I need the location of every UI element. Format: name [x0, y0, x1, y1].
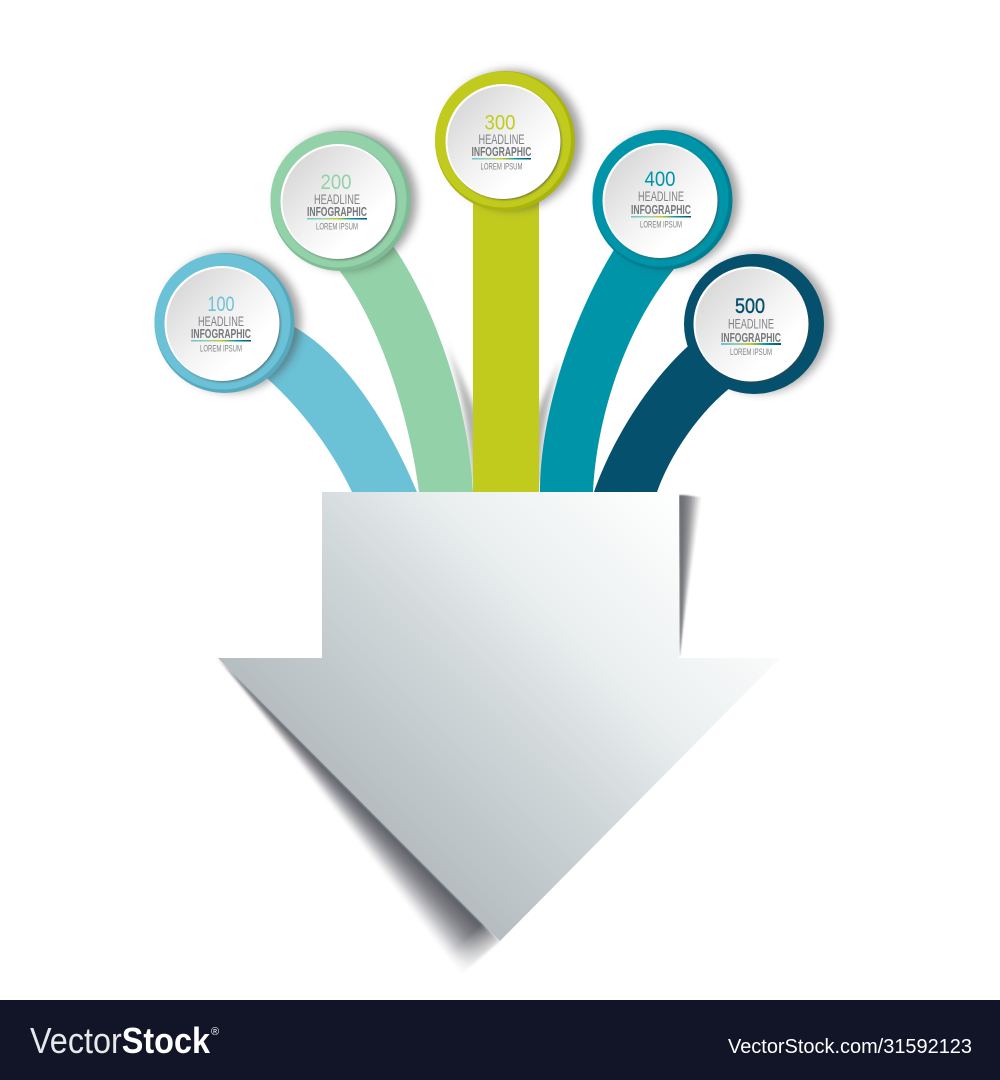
label 500 [721, 295, 781, 357]
label 200 [307, 171, 367, 232]
circle 300 [435, 70, 582, 211]
ribbon shadow: teal edge [533, 360, 560, 482]
label 400: 400 [644, 168, 676, 191]
circle 100 [154, 252, 301, 393]
ribbon: 200 mint green [335, 235, 473, 492]
label 500: HEADLINE [728, 316, 774, 332]
label 500: LOREM IPSUM [730, 347, 772, 357]
ribbon: 100 light blue [262, 322, 417, 492]
ribbon shadow: green edge [445, 340, 480, 482]
label 100: HEADLINE [198, 314, 244, 329]
label 400: INFOGRAPHIC [631, 203, 691, 217]
ribbon: 300 lime [473, 200, 539, 492]
ribbon: 500 dark blue [594, 340, 735, 492]
label 200: INFOGRAPHIC [307, 205, 367, 219]
arrow shadow: right side [679, 495, 701, 657]
label 500: INFOGRAPHIC [721, 331, 781, 345]
label 300: INFOGRAPHIC [472, 145, 532, 159]
big arrow [218, 492, 780, 941]
footer registered mark: ® [211, 1026, 219, 1038]
label 400 [631, 168, 691, 230]
label 300 [472, 112, 532, 172]
label 100: 100 [208, 293, 234, 316]
ribbon: 400 teal [540, 240, 680, 492]
arrow shadow: lower left [218, 658, 500, 974]
label 200: 200 [320, 171, 352, 194]
label 100: INFOGRAPHIC [191, 327, 251, 341]
label 400: HEADLINE [638, 189, 684, 204]
footer logo: VectorStock [30, 1020, 211, 1061]
label 200: LOREM IPSUM [316, 222, 358, 232]
circle 400 [592, 129, 739, 270]
circle 200 [270, 130, 417, 271]
label 300: 300 [484, 112, 516, 134]
footer bar [0, 1000, 1000, 1080]
label 100: LOREM IPSUM [200, 344, 242, 354]
circle 500 [684, 253, 831, 394]
label 300: LOREM IPSUM [480, 162, 522, 172]
footer url: VectorStock.com/31592123 [728, 1036, 972, 1058]
label 400: LOREM IPSUM [640, 220, 682, 230]
label 100 [191, 293, 251, 354]
label 200: HEADLINE [314, 192, 360, 207]
label 300: HEADLINE [478, 132, 524, 147]
label 500: 500 [735, 295, 765, 318]
